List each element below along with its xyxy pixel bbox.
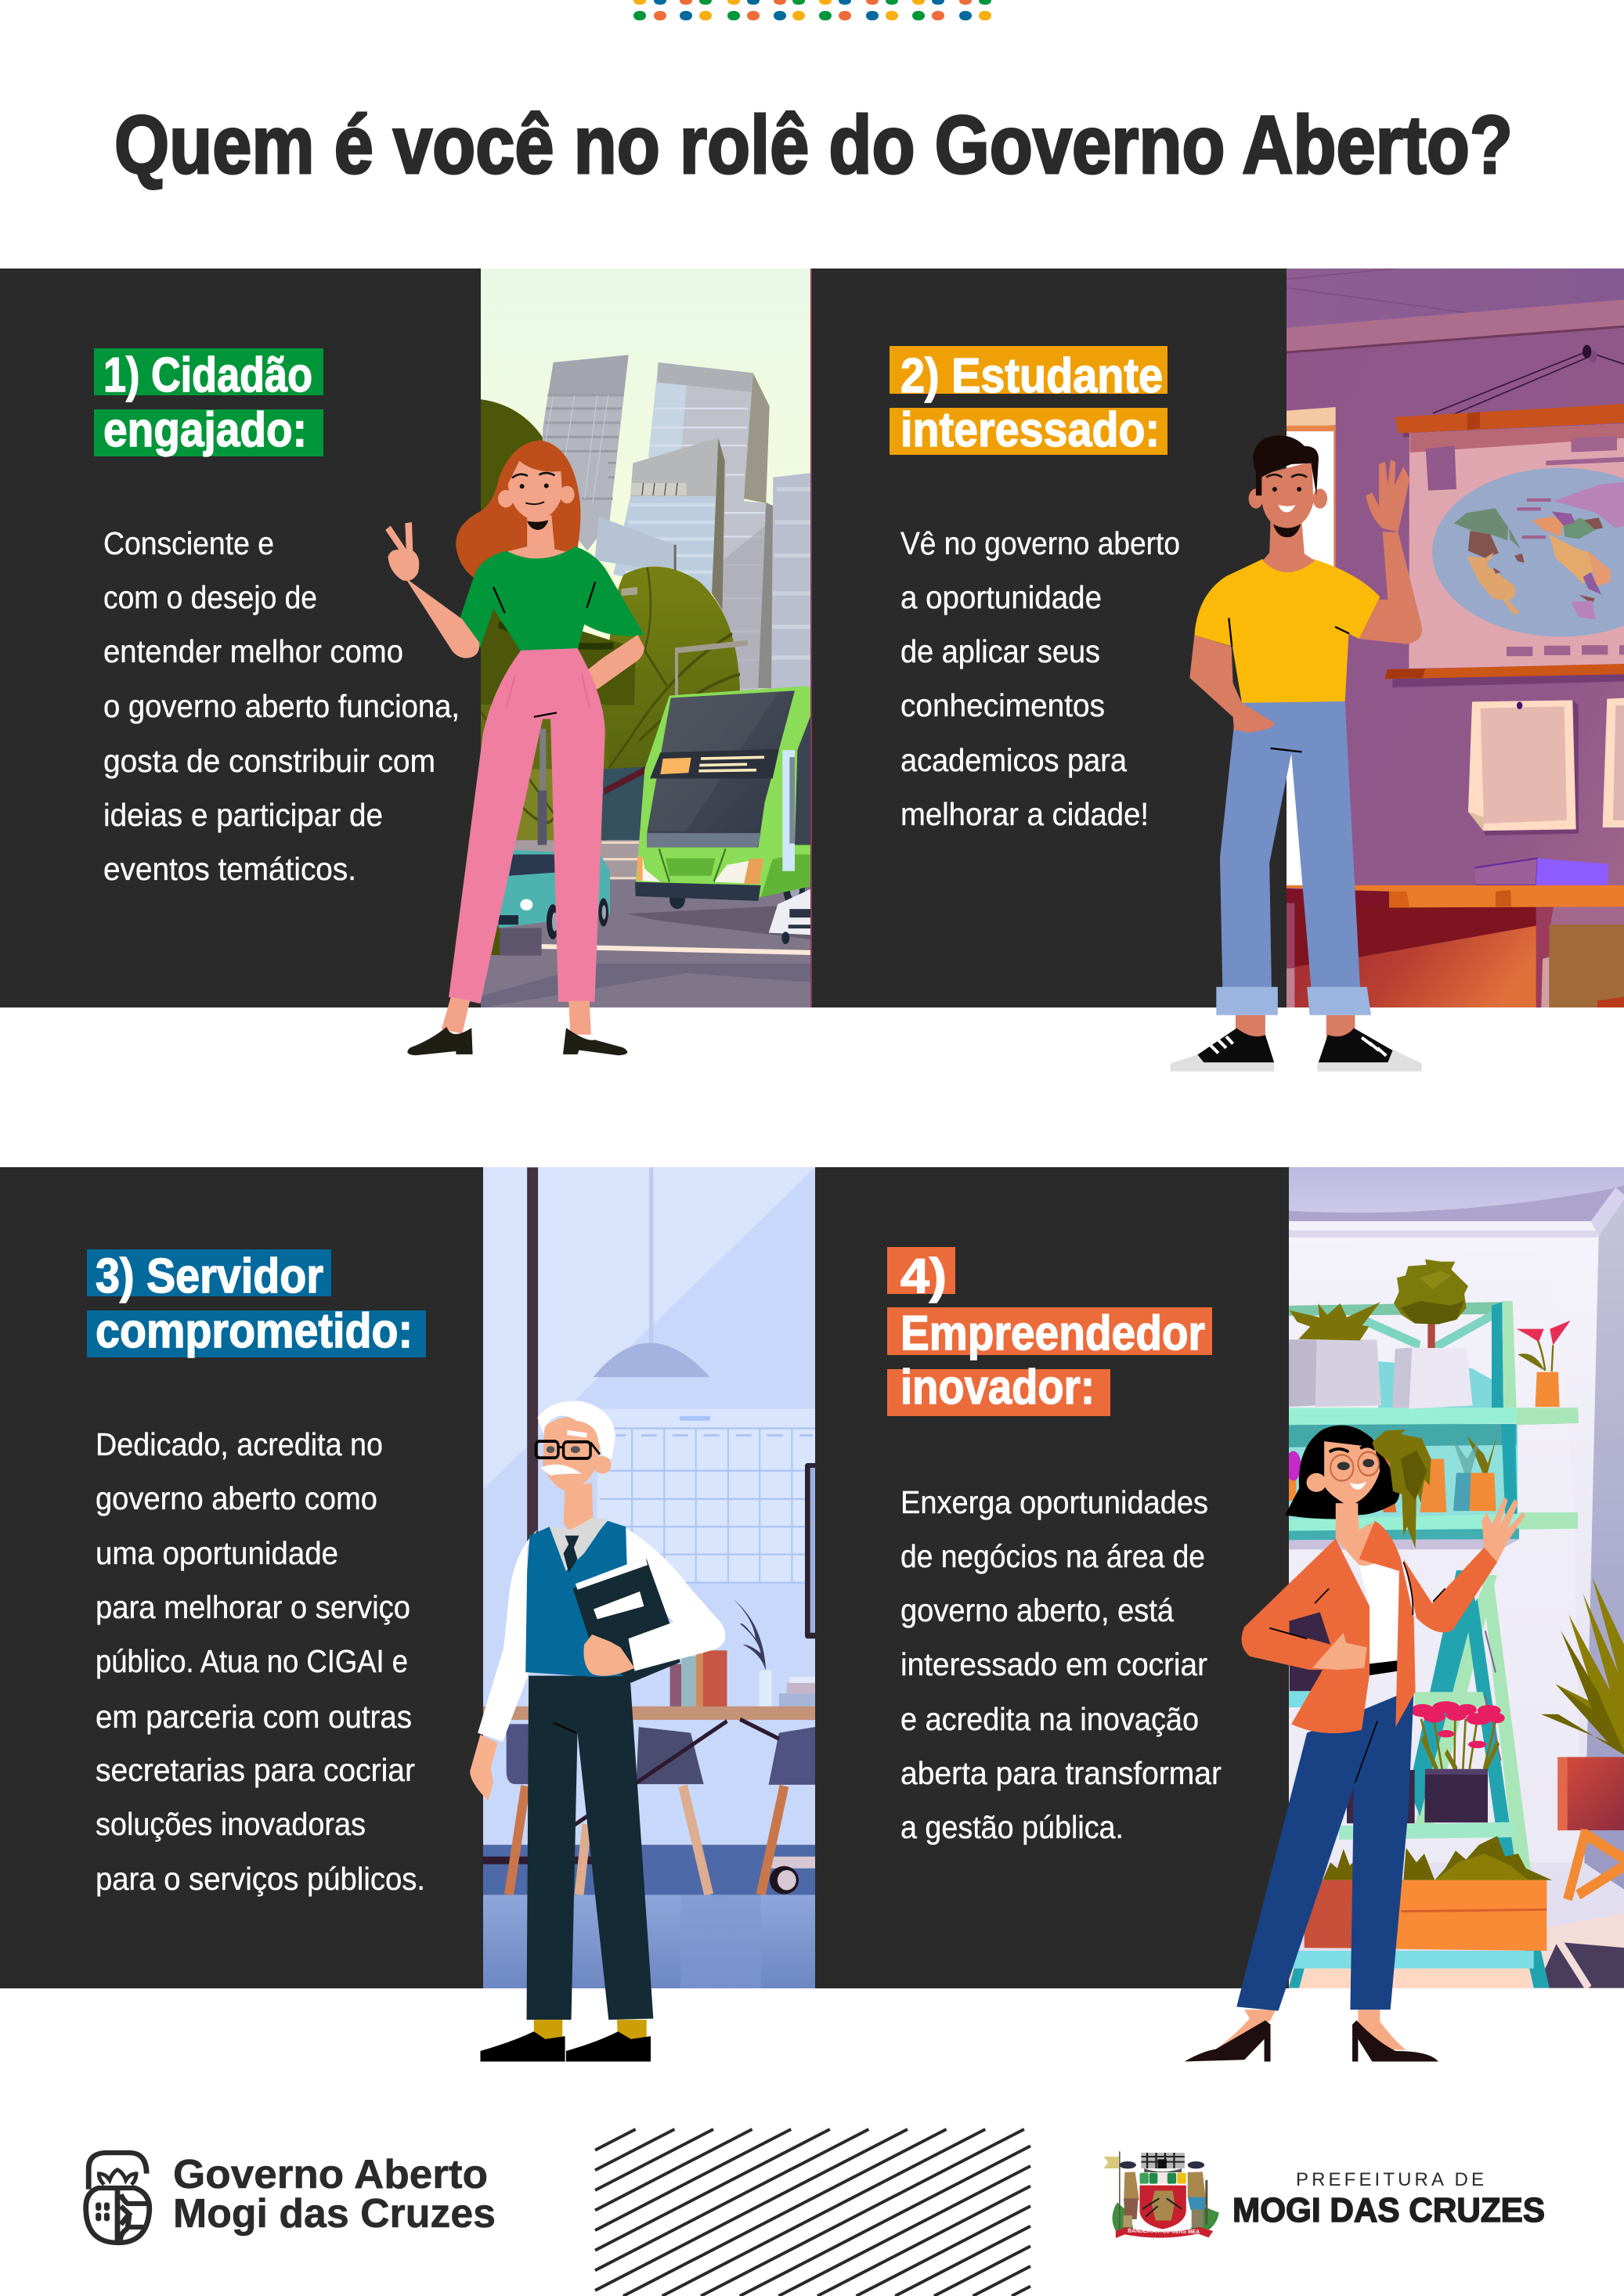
ladder [1284,1570,1532,1881]
car [488,849,610,956]
panel 3: dark text card [0,1167,483,1988]
body text 3: soluções inovadoras [96,1806,366,1842]
panel 3: office scene [478,1159,821,1995]
logo: Prefeitura de Mogi das Cruzes: MOGI DAS CRUZES [1232,2191,1545,2229]
heading 4: Empreendedor [900,1307,1205,1361]
logo: Prefeitura de Mogi das Cruzes [1104,2151,1545,2238]
panel 1: city scene [478,266,816,1008]
body text 3: governo aberto como [96,1480,377,1516]
body text 3: secretarias para cocriar [96,1752,415,1788]
body text 1: o governo aberto funciona, [103,688,460,724]
heading 1: engajado: [103,403,307,457]
white car [769,889,810,944]
heading 2 [890,346,1167,457]
upper shelf [1284,1301,1579,1549]
body text 1: Consciente e [103,525,274,561]
body text 4: governo aberto, está [900,1592,1174,1628]
heading 3: comprometido: [96,1304,413,1358]
top decorative dots [633,0,991,20]
body text 3: público. Atua no CIGAI e [96,1643,408,1679]
heading 4: inovador: [900,1361,1095,1415]
body text 1: com o desejo de [103,579,317,615]
heading 4 [887,1247,1212,1416]
window [1284,407,1336,887]
flower vase [1347,1701,1505,1823]
shields [1139,2173,1186,2184]
panel 4: plant shop scene [1284,1166,1624,1993]
figures [1119,2161,1207,2227]
body text 1 [103,525,460,887]
logo: Governo Aberto Mogi das Cruzes [86,2152,496,2243]
body text 4: aberta para transformar [900,1755,1222,1791]
body text 2: melhorar a cidade! [900,796,1149,832]
heading 3: 3) Servidor [96,1249,323,1303]
body text 4: a gestão pública. [900,1809,1124,1845]
floor [478,1786,815,1989]
panel 2: dark text card [812,269,1287,1007]
body text 4: interessado em cocriar [900,1646,1207,1682]
body text 3: para melhorar o serviço [96,1589,410,1625]
body text 2: conhecimentos [900,687,1105,723]
body text 3: em parceria com outras [96,1699,412,1735]
body text 1: gosta de constribuir com [103,743,435,779]
body text 4: de negócios na área de [900,1538,1205,1574]
pillar [527,1167,538,1544]
body text 2: a oportunidade [900,579,1102,615]
logo: Governo Aberto Mogi das Cruzes: Mogi das Cruzes [173,2191,496,2237]
body text 2: de aplicar seus [900,633,1100,669]
character 1: woman in pink trousers [385,440,644,1055]
bus [635,686,816,909]
body text 2: Vê no governo aberto [900,525,1180,561]
icon [86,2153,150,2243]
heading 1 [94,348,323,457]
body text 1: eventos temáticos. [103,851,356,887]
wall calendar [597,1409,815,1584]
logo: Prefeitura de Mogi das Cruzes: PREFEITURA DE [1296,2169,1484,2190]
logo: Governo Aberto Mogi das Cruzes: Governo Aberto [173,2152,488,2197]
panel 2: classroom scene [1284,266,1624,1010]
body text 3 [96,1426,425,1897]
heading 4: 4) [900,1249,947,1303]
body text 3: para o serviços públicos. [96,1861,425,1897]
pinned notes [1468,698,1624,835]
body text 2 [900,525,1180,832]
wall map [1384,345,1624,687]
body text 4 [900,1484,1222,1845]
body text 1: ideias e participar de [103,797,383,833]
body text 3: uma oportunidade [96,1535,338,1571]
municipal coat of arms: BANDEIRANTES GENS MEA [1128,2227,1200,2235]
character 4: entrepreneur in orange blazer [1185,1426,1525,2062]
body text 3: Dedicado, acredita no [96,1426,383,1462]
heading 2: interessado: [900,403,1160,457]
body text 4: Enxerga oportunidades [900,1484,1208,1520]
diagonal stripes block [595,2129,1030,2296]
character 3: civil servant with book [470,1401,725,2062]
body text 4: e acredita na inovação [900,1701,1199,1737]
binder and table [1284,858,1624,1010]
municipal coat of arms [1104,2151,1219,2238]
heading 1: 1) Cidadão [103,348,312,402]
heading 2: 2) Estudante [900,349,1163,403]
heading 3 [87,1249,426,1358]
potted plants [1286,1260,1571,1512]
desk and items [478,1599,815,1827]
body text 1: entender melhor como [103,633,403,669]
body text 2: academicos para [900,742,1127,778]
panel 4: dark text card [815,1167,1289,1988]
character 2: student in yellow t-shirt [1171,435,1422,1072]
big plant and planter [1541,1570,1624,1830]
panel 1: dark text card [0,269,481,1007]
pendant lamp [593,1167,710,1377]
